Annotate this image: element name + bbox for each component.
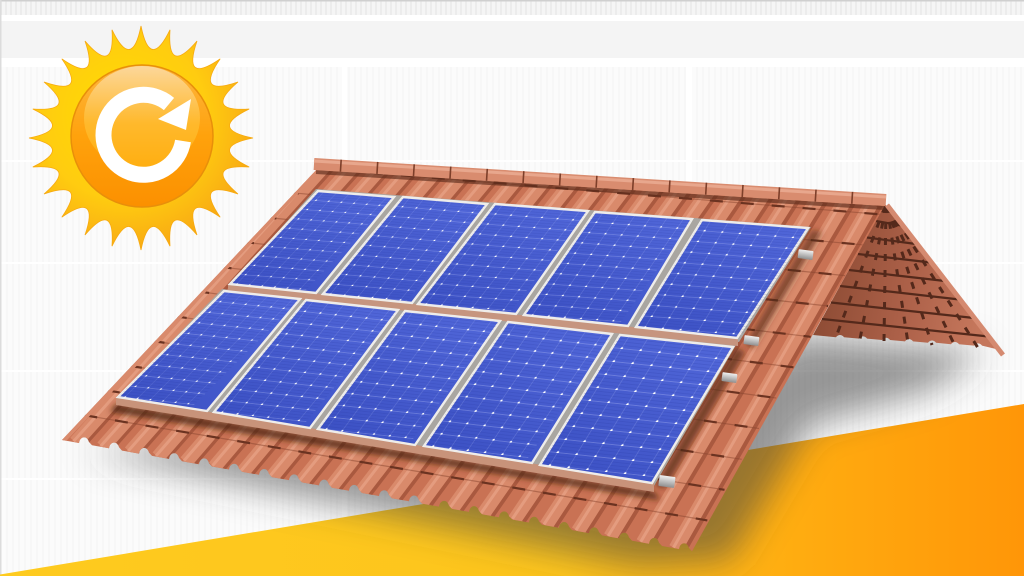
sun icon with renewal arrow (29, 26, 253, 250)
tile barrel shadows (84, 163, 880, 550)
renewal arrow shaft (103, 95, 183, 175)
left verge of the roof (60, 166, 318, 441)
upper rail backing (228, 189, 811, 342)
lower rail backing (116, 289, 736, 486)
orange and yellow swoosh band (0, 404, 1024, 576)
sun rays (29, 26, 253, 250)
clamp lower bottom (658, 475, 676, 488)
tile course arcs (84, 168, 880, 520)
panel 6 (118, 291, 300, 411)
panel 7 (214, 300, 398, 428)
solar panel array (116, 189, 814, 492)
panel 4 (524, 212, 692, 326)
tile course shadows (84, 168, 880, 520)
panel 8 (318, 311, 500, 445)
upper bottom rail (228, 284, 738, 346)
orb glossy highlight (84, 66, 200, 170)
tile barrel highlights (74, 160, 869, 548)
main tiled roof slope (62, 170, 884, 551)
panel 2 (323, 197, 487, 303)
panel 1 (230, 191, 394, 293)
gable side of the roof (813, 204, 1003, 355)
clamp upper bottom (743, 335, 759, 346)
gable verge edge (887, 205, 1003, 355)
panel 10 (540, 335, 733, 483)
panel shadow on tiles (110, 230, 822, 500)
tile barrels (76, 161, 871, 549)
panel 9 (424, 322, 612, 463)
orange orb (71, 65, 213, 207)
panel 3 (418, 204, 588, 314)
ridge cap tiles (314, 161, 886, 208)
cast shadow under the roof (85, 335, 985, 566)
lower bottom rail (116, 397, 654, 492)
gable tile rows (822, 221, 988, 336)
clamp upper right (798, 249, 814, 260)
renewal arrow head (158, 99, 191, 130)
clamp lower right (721, 372, 737, 383)
gable tile joints (836, 206, 980, 351)
panel 5 (636, 220, 808, 338)
